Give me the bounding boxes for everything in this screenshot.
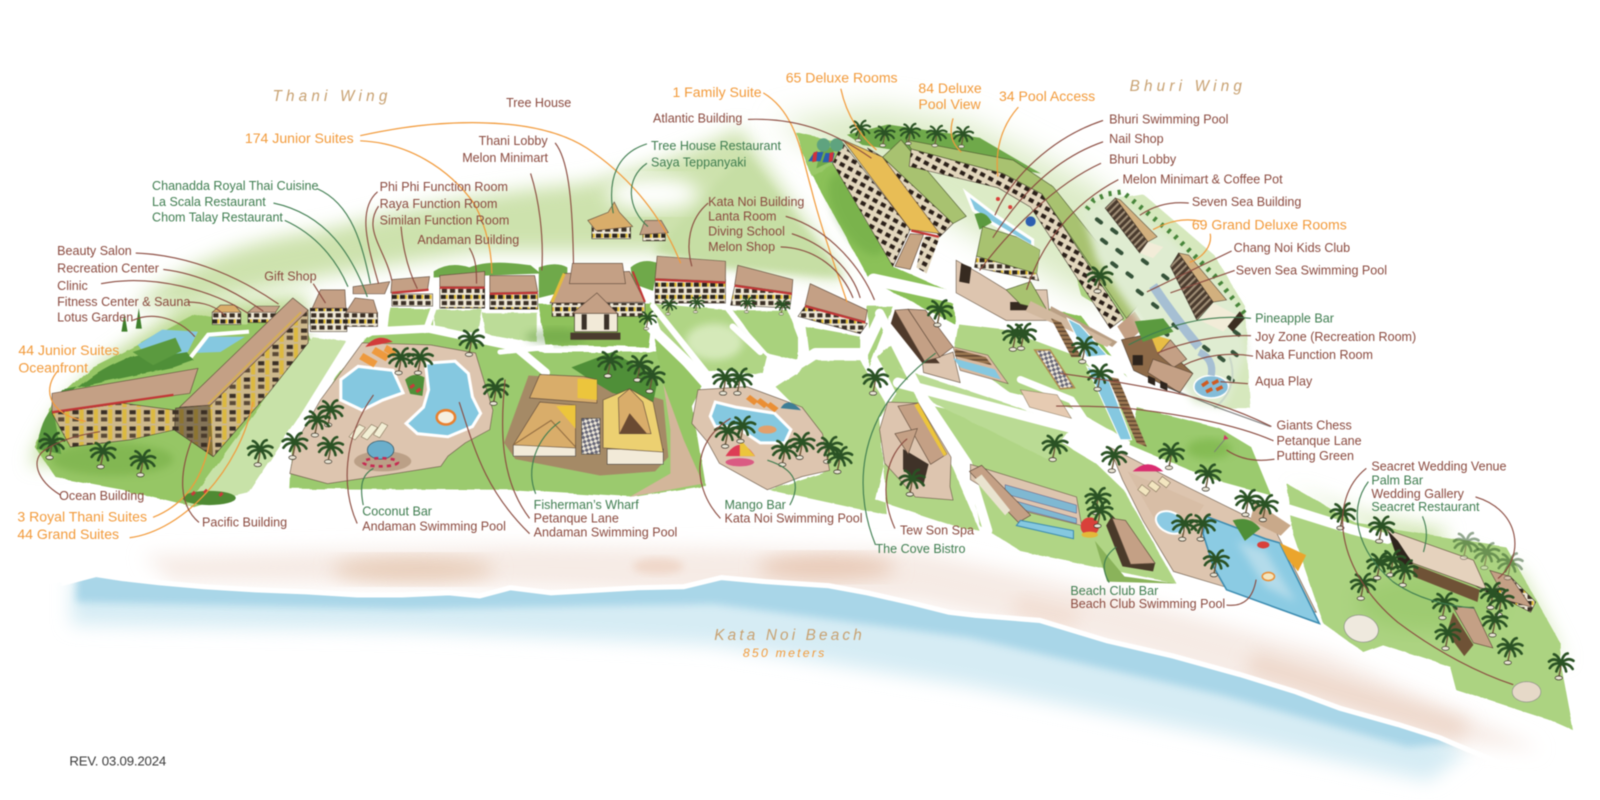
callout 1 Family Suite: 1 Family Suite [672, 84, 762, 100]
callout 44 Grand Suites: 44 Grand Suites [17, 526, 119, 542]
callout Melon Minimart [462, 151, 549, 270]
callout Diving School [708, 225, 860, 298]
beach length: 850 meters [743, 646, 827, 660]
callout Gift Shop [264, 270, 326, 303]
Fitness and Recreation buildings [212, 305, 280, 324]
Aqua Play [1163, 352, 1270, 427]
Tew Son Spa [880, 402, 953, 500]
umbrella and loungers [349, 338, 397, 440]
callout Kata Noi Swimming Pool [700, 418, 863, 525]
callout Atlantic Building [653, 111, 871, 158]
Mango Bar umbrella [726, 439, 755, 466]
Kids playground domes [808, 138, 843, 162]
beach sand [143, 546, 1541, 750]
callout Raya Function Room [373, 197, 497, 281]
callout Clinic [57, 279, 248, 313]
callout 44 Junior Suites Oceanfront [18, 342, 119, 421]
Giants Chess board [1035, 350, 1074, 389]
callout Palm Bar [1357, 474, 1474, 608]
callout Thani Lobby: Thani Lobby [479, 134, 548, 148]
callout Tree House Restaurant [612, 139, 781, 213]
callout Pacific Building: Pacific Building [202, 516, 287, 530]
surf line [61, 574, 1500, 763]
callout La Scala Restaurant: La Scala Restaurant [152, 195, 266, 209]
callout Mango Bar [724, 460, 795, 512]
callout Beauty Salon [57, 244, 279, 304]
callout Beach Club Bar: Beach Club Bar [1070, 584, 1158, 598]
Bhuri Lobby buildings [956, 227, 1117, 347]
Beach Club Bar [1095, 515, 1177, 584]
callout Chang Noi Kids Club: Chang Noi Kids Club [1234, 241, 1350, 255]
callout 174 Junior Suites [245, 123, 681, 273]
callout Joy Zone: Joy Zone (Recreation Room) [1255, 330, 1416, 344]
callout Melon Shop: Melon Shop [708, 240, 775, 254]
Petanque court [1020, 390, 1071, 418]
Thani Wing title: Thani Wing [272, 88, 392, 105]
Kata Noi swimming pool [710, 402, 791, 443]
callout Giants Chess [1060, 373, 1352, 433]
callout Seven Sea Building [1140, 195, 1301, 215]
callout Chanadda Royal Thai Cuisine: Chanadda Royal Thai Cuisine [152, 179, 319, 193]
callout 34 Pool Access [997, 88, 1095, 177]
callout Fitness Center [57, 295, 226, 316]
callout Seven Sea Swimming Pool: Seven Sea Swimming Pool [1236, 263, 1387, 277]
callout Naka Function Room [1184, 348, 1373, 365]
callout Beauty Salon: Beauty Salon [57, 244, 132, 258]
callout Seven Sea Building: Seven Sea Building [1192, 195, 1301, 209]
Coconut Bar [354, 441, 411, 471]
callout Kata Noi Swimming Pool: Kata Noi Swimming Pool [724, 511, 863, 525]
Seacret Restaurant [1387, 530, 1536, 656]
callout Bhuri Swimming Pool: Bhuri Swimming Pool [1109, 112, 1228, 126]
callout Petanque Lane east [1056, 406, 1362, 448]
callout Kata Noi Building: Kata Noi Building [708, 195, 804, 209]
Tree House [588, 202, 668, 241]
callout Putting Green [1227, 449, 1354, 463]
callout Saya Teppanyaki: Saya Teppanyaki [651, 155, 746, 169]
callout Andaman Swimming Pool west [347, 395, 506, 534]
callout Melon Minimart and Coffee Pot: Melon Minimart & Coffee Pot [1122, 173, 1283, 187]
Seven Sea Building [1105, 198, 1245, 332]
Andaman swimming pools [341, 361, 481, 437]
tan pathway [630, 384, 703, 497]
sea [71, 571, 1469, 781]
Kata Noi Beach title: Kata Noi Beach [714, 627, 865, 644]
callout Recreation Center: Recreation Center [57, 261, 159, 275]
callout Wedding Gallery: Wedding Gallery [1371, 487, 1465, 501]
Pacific Building [174, 298, 308, 457]
callout Phi Phi Function Room: Phi Phi Function Room [380, 180, 508, 194]
callout Andaman Swimming Pool east: Andaman Swimming Pool [534, 526, 677, 540]
callout Fitness Center: Fitness Center & Sauna [57, 295, 190, 309]
callout Fisherman's Wharf [532, 421, 639, 512]
roads [288, 280, 1388, 539]
callout Bhuri Lobby: Bhuri Lobby [1109, 152, 1177, 166]
callout La Scala Restaurant [152, 195, 367, 297]
callout 84 Deluxe Pool View: Pool View [918, 96, 982, 112]
Bhuri Wing title: Bhuri Wing [1130, 78, 1246, 95]
Kata Noi Building row [655, 256, 867, 334]
Bhuri swimming pool [966, 193, 1036, 247]
callout Seacret Restaurant [1371, 500, 1480, 552]
callout Raya Function Room: Raya Function Room [380, 197, 497, 211]
callout Petanque Lane west [503, 380, 619, 525]
callout Tew Son Spa [886, 439, 974, 538]
callout Beach Club Swimming Pool: Beach Club Swimming Pool [1070, 597, 1225, 611]
lawn shading [51, 164, 1500, 631]
Wedding venues [1341, 611, 1541, 702]
callout Putting Green: Putting Green [1277, 449, 1354, 463]
callout 3 Royal Thani Suites [17, 437, 210, 524]
callout Aqua Play [1220, 375, 1313, 389]
callout Melon Shop [708, 240, 853, 298]
label Tree House: Tree House [506, 96, 571, 110]
callout Thani Lobby [479, 134, 573, 263]
callout 1 Family Suite [672, 84, 847, 302]
callout 44 Junior Suites Oceanfront: 44 Junior Suites [18, 342, 119, 358]
callout Similan Function Room: Similan Function Room [380, 213, 509, 227]
callout Kata Noi Building [689, 195, 804, 266]
callout Bhuri Swimming Pool [995, 112, 1228, 215]
callout 84 Deluxe Pool View: 84 Deluxe [918, 80, 982, 96]
Beach Club cabanas [969, 464, 1082, 539]
callout Nail Shop [993, 132, 1164, 238]
callout Chanadda Royal Thai Cuisine [152, 179, 370, 284]
callout Joy Zone [1157, 330, 1416, 353]
callout Pineapple Bar: Pineapple Bar [1255, 311, 1334, 325]
callout Diving School: Diving School [708, 225, 785, 239]
callout Andaman Building [417, 233, 519, 284]
callout The Cove Bistro: The Cove Bistro [876, 542, 965, 556]
callout Seacret Wedding Venue: Seacret Wedding Venue [1371, 459, 1507, 473]
Beach Club plaza and pool [1081, 447, 1319, 623]
callout Tew Son Spa: Tew Son Spa [900, 524, 974, 538]
callout 44 Grand Suites [17, 402, 253, 542]
callout Chom Talay Restaurant [152, 210, 348, 287]
callout Pacific Building [183, 440, 287, 530]
callout Melon Minimart and Coffee Pot [1027, 173, 1283, 290]
callout Tree House Restaurant: Tree House Restaurant [651, 139, 781, 153]
callout Clinic: Clinic [57, 279, 88, 293]
callout 69 Grand Deluxe Rooms [1153, 217, 1347, 262]
Gift Shop and function buildings row [310, 271, 538, 332]
Atlantic Building [816, 140, 966, 273]
callout 84 Deluxe Pool View [918, 80, 982, 152]
map [35, 121, 1573, 731]
callout Recreation Center [57, 261, 263, 311]
callout Melon Minimart: Melon Minimart [462, 151, 549, 165]
lawns [35, 133, 1573, 731]
callout Similan Function Room [380, 213, 509, 289]
callout Coconut Bar: Coconut Bar [362, 504, 432, 518]
callout 3 Royal Thani Suites: 3 Royal Thani Suites [17, 508, 147, 524]
callout Pineapple Bar [1129, 311, 1334, 345]
callout Fisherman's Wharf: Fisherman’s Wharf [534, 498, 639, 512]
callout Chom Talay Restaurant: Chom Talay Restaurant [152, 210, 283, 224]
callout Phi Phi Function Room [366, 180, 508, 284]
callout Giants Chess: Giants Chess [1277, 419, 1352, 433]
callout The Cove Bistro [863, 353, 965, 556]
hedges [37, 124, 1041, 454]
callout 34 Pool Access: 34 Pool Access [999, 88, 1095, 104]
callout Lanta Room: Lanta Room [708, 209, 777, 223]
callout Lotus Garden: Lotus Garden [57, 310, 133, 324]
The Cove Bistro buildings [891, 309, 1008, 384]
callout Nail Shop: Nail Shop [1109, 132, 1164, 146]
callout Lanta Room [708, 209, 874, 300]
callout 174 Junior Suites: 174 Junior Suites [245, 130, 354, 146]
callout Aqua Play: Aqua Play [1255, 375, 1313, 389]
callout Petanque Lane east: Petanque Lane [1277, 434, 1362, 448]
Kata Noi pool plaza [692, 387, 830, 490]
callout 65 Deluxe Rooms: 65 Deluxe Rooms [786, 70, 898, 86]
canals and chess [1020, 301, 1229, 452]
callout Chang Noi Kids Club [1147, 241, 1350, 292]
callout Bhuri Lobby [980, 152, 1177, 270]
callout Petanque Lane west: Petanque Lane [534, 511, 619, 525]
callout Seacret Restaurant: Seacret Restaurant [1371, 500, 1480, 514]
Joy Zone and Naka building [1121, 318, 1193, 393]
callout Coconut Bar [362, 468, 432, 518]
callout Ocean Building [37, 432, 144, 503]
Tree plantings [40, 121, 1573, 680]
callout Andaman Swimming Pool west: Andaman Swimming Pool [362, 520, 506, 534]
Fisherman's Wharf [504, 352, 668, 476]
Bhuri long wing [906, 140, 1145, 343]
Seven Sea garden [1082, 192, 1247, 408]
Thani Lobby [550, 263, 645, 340]
callout Andaman Swimming Pool east [459, 402, 677, 540]
callout Beach Club Swimming Pool [1070, 580, 1256, 611]
north watercolor lawn [31, 107, 1566, 663]
callout Ocean Building: Ocean Building [59, 489, 144, 503]
callout Palm Bar: Palm Bar [1371, 474, 1423, 488]
callout 69 Grand Deluxe Rooms: 69 Grand Deluxe Rooms [1192, 217, 1347, 233]
callout Atlantic Building: Atlantic Building [653, 111, 742, 125]
callout Mango Bar: Mango Bar [724, 498, 786, 512]
Andaman pool plaza [290, 338, 493, 484]
callout Seven Sea Swimming Pool [1170, 263, 1387, 293]
callout 65 Deluxe Rooms [786, 70, 898, 150]
callout Wedding Gallery [1371, 487, 1515, 579]
callout Saya Teppanyaki [631, 155, 746, 227]
Ocean Building [52, 368, 198, 447]
callout Seacret Wedding Venue [1343, 459, 1513, 685]
Lotus Garden pools [133, 330, 249, 365]
callout Beach Club Bar [1070, 547, 1158, 598]
callout Naka Function Room: Naka Function Room [1255, 348, 1373, 362]
putting flag [1214, 440, 1224, 452]
callout 44 Junior Suites Oceanfront: Oceanfront [18, 359, 88, 375]
callout Andaman Building: Andaman Building [417, 233, 519, 247]
callout Lotus Garden [57, 310, 195, 337]
revision date: REV. 03.09.2024 [69, 753, 166, 768]
callout Gift Shop: Gift Shop [264, 270, 317, 284]
